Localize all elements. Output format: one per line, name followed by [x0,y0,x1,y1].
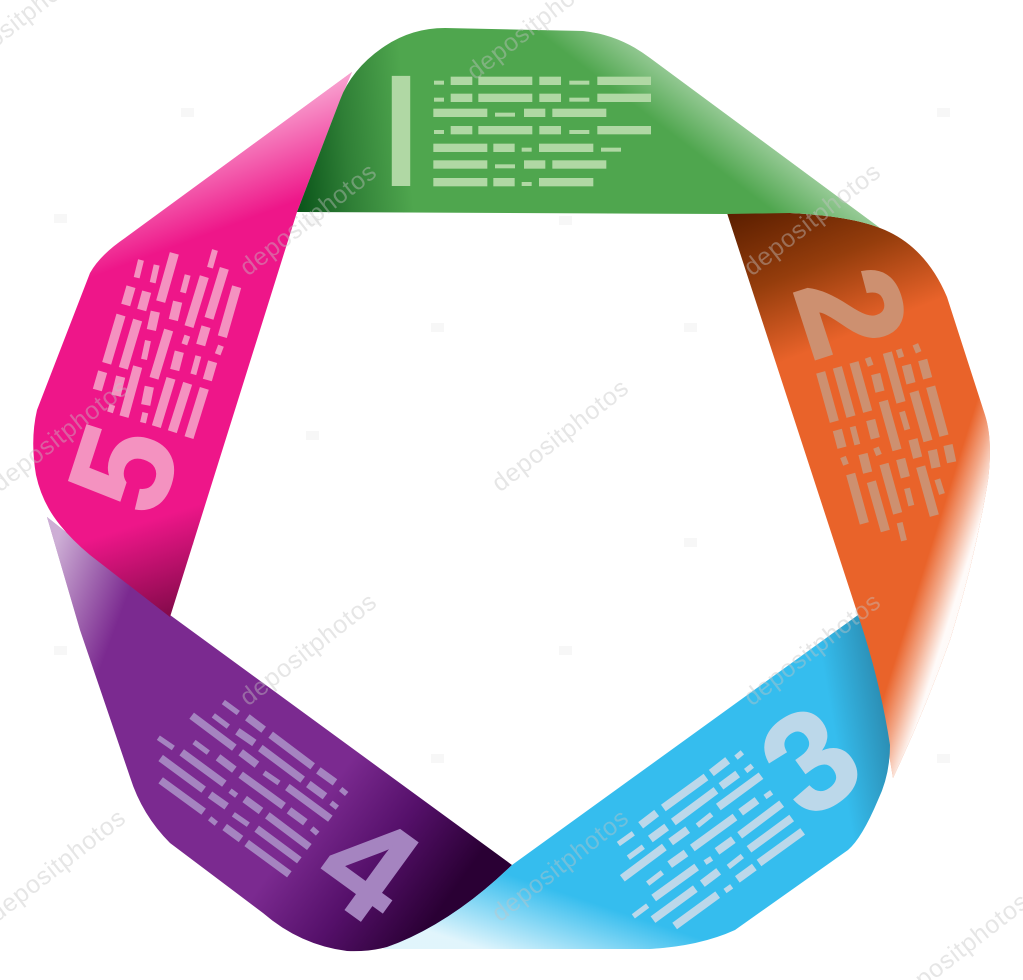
ribbon shape purple [47,517,512,951]
text lines step 5 [97,250,237,438]
fade at ribbon edge [727,213,990,778]
text lines step 4 [158,702,347,874]
ribbon shape orange [727,213,990,778]
text lines step 1 [433,77,651,186]
number 5: 5 [37,407,210,529]
ribbon shape blue [383,615,890,949]
watermark text: depositphotos [486,804,634,928]
watermark text: depositphotos [486,374,634,498]
ribbon shape pink [33,72,352,617]
watermark text: depositphotos [738,158,886,282]
camera watermark marks [54,108,950,763]
text lines step 2 [821,344,952,541]
number 1: I [383,41,419,220]
watermark text: depositphotos [738,588,886,712]
watermark text: depositphotos [234,158,382,282]
watermark text: depositphotos [234,588,382,712]
panel: step 5 pink ribbon [33,72,352,617]
number 3: 3 [733,674,888,847]
text lines step 3 [618,752,803,926]
panel: step 4 purple ribbon [47,517,512,953]
number 2: 2 [764,249,939,374]
panel: step 3 blue ribbon [383,615,890,949]
ribbon shape green [297,28,880,228]
panel: step 2 orange ribbon [727,213,990,778]
number 4: 4 [291,780,446,953]
panel: step 1 green ribbon [297,28,880,228]
